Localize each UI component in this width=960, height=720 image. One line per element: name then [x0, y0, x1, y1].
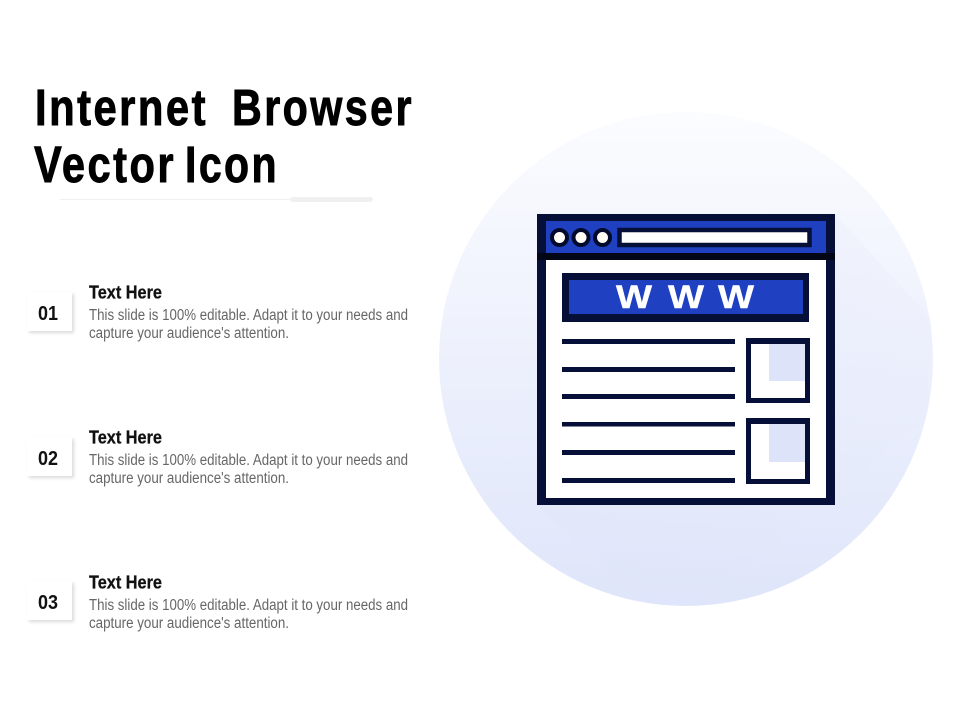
title bar: [546, 221, 826, 253]
item 01 body: [89, 307, 408, 342]
item 02: [27, 426, 408, 487]
item 02 body: [89, 452, 408, 487]
number badge 02: 02: [38, 448, 58, 470]
www banner: [562, 273, 809, 322]
item 03 body: This slide is 100% editable. Adapt it to your needs and: [89, 597, 408, 614]
www text: W: [718, 279, 755, 315]
item 02 body: capture your audience's attention.: [89, 470, 289, 487]
item 01 body: This slide is 100% editable. Adapt it to your needs and: [89, 307, 408, 324]
image placeholder 1: [746, 338, 810, 403]
image placeholder 2: [746, 418, 810, 484]
www text: [616, 279, 755, 315]
window control dots: [552, 230, 610, 245]
title: Icon: [185, 136, 279, 193]
title: Vector: [34, 136, 176, 193]
text lines: [562, 339, 735, 483]
item 03 body: capture your audience's attention.: [89, 615, 289, 632]
number badge 01: 01: [38, 303, 58, 325]
item 02 body: This slide is 100% editable. Adapt it to your needs and: [89, 452, 408, 469]
number badge 02: [27, 437, 72, 476]
www text: W: [616, 279, 653, 315]
window content area: [546, 260, 826, 498]
window frame: [537, 214, 835, 505]
item 03: [27, 572, 408, 632]
title bar divider: [537, 253, 835, 260]
icon long shadow: [537, 214, 932, 606]
item 01 body: capture your audience's attention.: [89, 325, 289, 342]
item 03 body: [89, 597, 408, 632]
item 02 heading: Text Here: [89, 426, 162, 448]
background circle: [439, 112, 933, 606]
title underline: [60, 197, 373, 202]
title: [34, 79, 414, 193]
number badge 03: 03: [38, 592, 58, 614]
item 01 heading: Text Here: [89, 282, 162, 302]
address bar: [620, 230, 810, 245]
title: Browser: [232, 79, 414, 136]
www text: W: [668, 279, 705, 315]
icon: browser window: [537, 214, 835, 505]
item 03 heading: Text Here: [89, 572, 162, 592]
number badge 01: [27, 292, 72, 331]
number badge 03: [27, 581, 72, 620]
item 01: [27, 282, 408, 342]
title: Internet: [35, 79, 208, 136]
